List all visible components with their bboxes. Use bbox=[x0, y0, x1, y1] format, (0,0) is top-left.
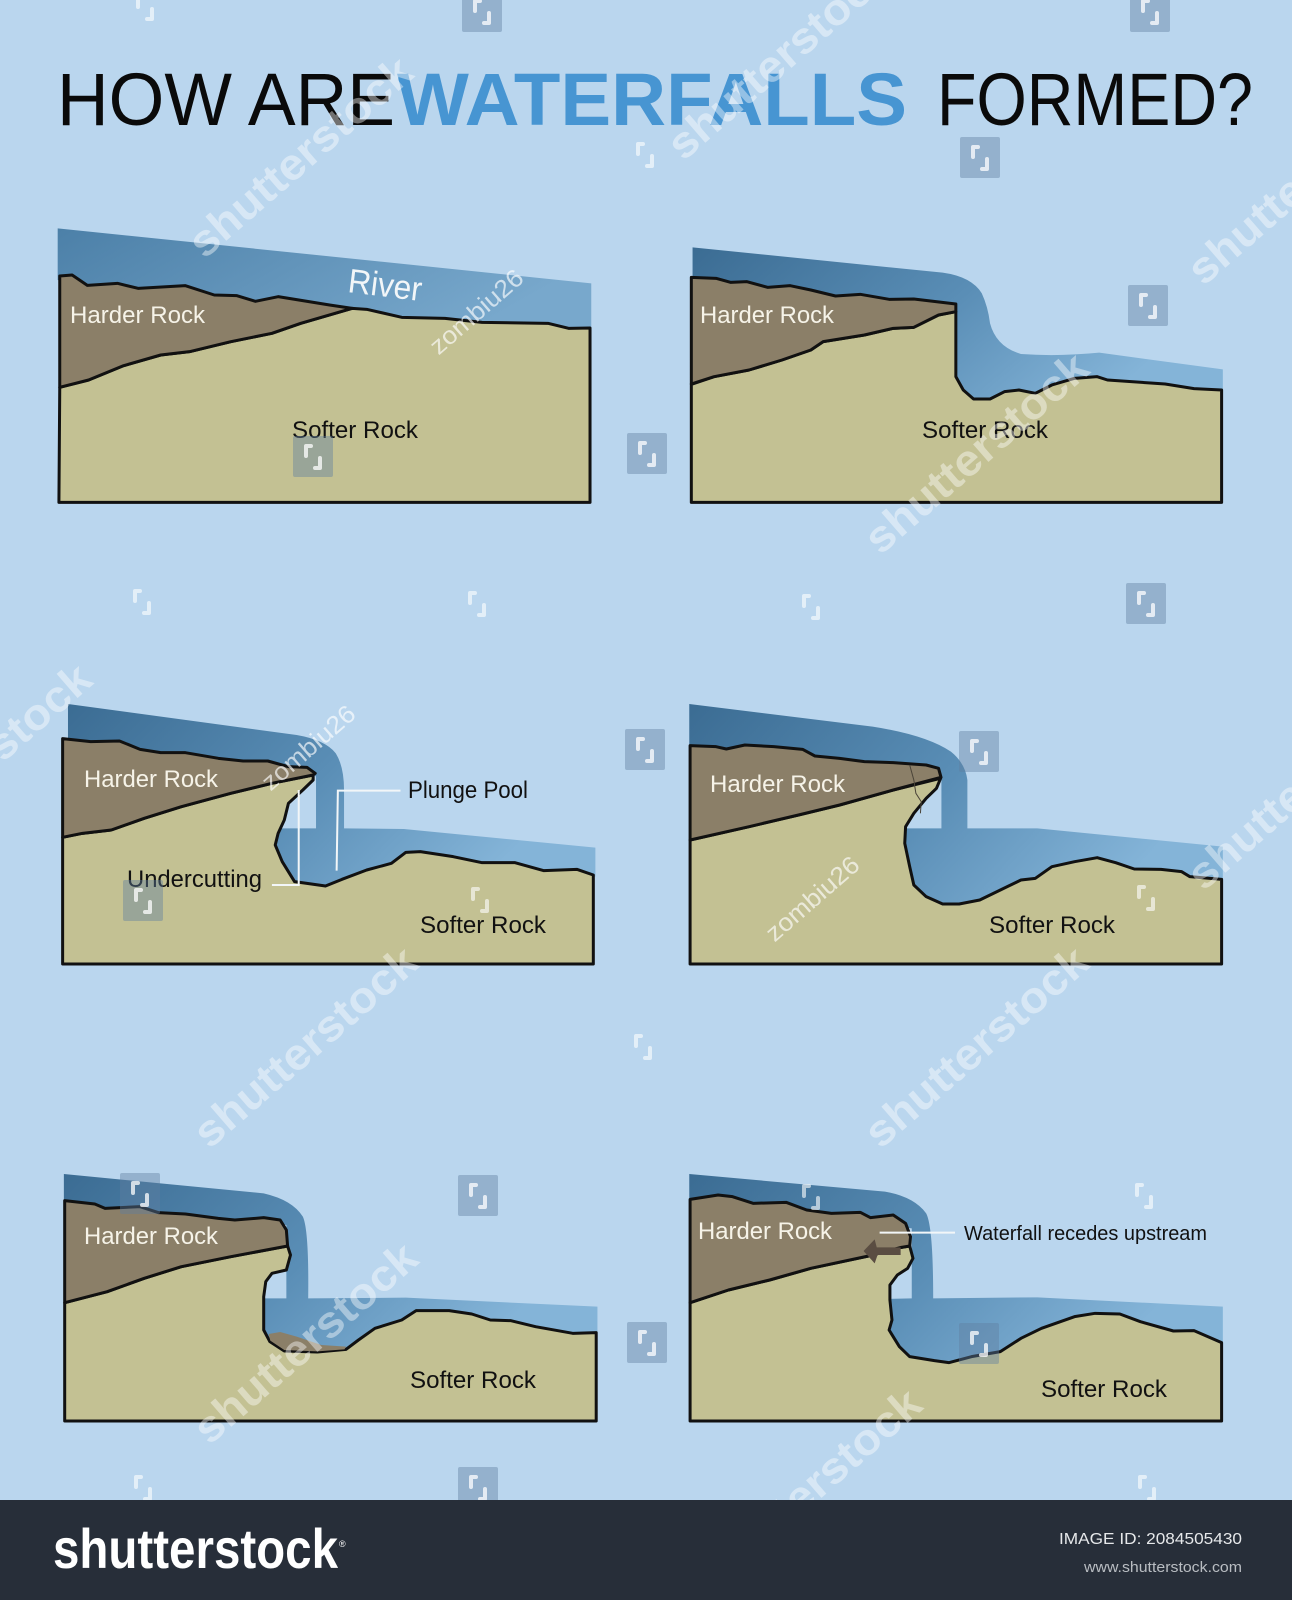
label: softer rock: Softer Rock bbox=[292, 417, 419, 444]
watermarks: shutterstock bbox=[179, 46, 423, 267]
water: river and fall bbox=[693, 247, 1223, 403]
arrow: recession direction bbox=[864, 1239, 901, 1263]
label: harder rock: Harder Rock bbox=[698, 1218, 833, 1245]
watermarks: shutterstock bbox=[855, 936, 1099, 1157]
water: river, fall and pool bbox=[64, 1174, 597, 1353]
harder rock bbox=[65, 1201, 288, 1303]
title: FORMED? bbox=[937, 58, 1253, 141]
label: harder rock: Harder Rock bbox=[84, 766, 219, 793]
softer rock bbox=[63, 775, 593, 964]
label: harder rock: Harder Rock bbox=[710, 771, 846, 798]
label: harder rock: Harder Rock bbox=[70, 302, 206, 329]
label: harder rock: Harder Rock bbox=[84, 1223, 219, 1250]
label: harder rock: Harder Rock bbox=[700, 302, 835, 329]
leader line bbox=[880, 1232, 955, 1234]
label: softer rock: Softer Rock bbox=[922, 417, 1049, 444]
watermarks: shutterstock bbox=[184, 936, 428, 1157]
label: plunge pool: Plunge Pool bbox=[408, 777, 528, 804]
panel: stage 4 deeper pool and cracking bbox=[689, 704, 1223, 964]
watermarks: zombiu26 bbox=[256, 700, 361, 796]
watermarks: zombiu26 bbox=[424, 264, 529, 360]
footer logo: shutterstock bbox=[53, 1517, 339, 1580]
image id: IMAGE ID: 2084505430 bbox=[1059, 1531, 1242, 1548]
watermarks: shutterstock bbox=[184, 1232, 428, 1453]
softer rock bbox=[65, 1246, 596, 1421]
title: HOW ARE bbox=[57, 58, 395, 141]
title: WATERFALLS bbox=[397, 58, 907, 141]
watermarks: zombiu26 bbox=[760, 851, 865, 947]
harder rock bbox=[60, 275, 352, 387]
watermarks: shutterstock bbox=[688, 1378, 932, 1599]
softer rock bbox=[690, 1246, 1222, 1421]
title bbox=[57, 58, 1253, 141]
softer rock bbox=[691, 312, 1222, 502]
label: softer rock: Softer Rock bbox=[410, 1367, 537, 1394]
harder rock bbox=[690, 1195, 911, 1303]
label: waterfall recedes upstream: Waterfall recedes upstream bbox=[964, 1223, 1207, 1245]
panel: stage 1 river over rock bbox=[58, 228, 591, 502]
panel: stage 3 plunge pool and undercutting bbox=[63, 704, 595, 964]
panel: stage 5 collapse and sediment bbox=[64, 1174, 597, 1421]
label: softer rock: Softer Rock bbox=[989, 912, 1116, 939]
water: river, fall and pool bbox=[689, 1174, 1223, 1367]
softer rock bbox=[59, 308, 590, 502]
harder rock bbox=[690, 745, 941, 840]
leader line: undercutting bbox=[272, 790, 299, 885]
panel: stage 6 waterfall recedes bbox=[689, 1174, 1223, 1421]
harder rock bbox=[691, 277, 956, 384]
water: river, fall and pool bbox=[689, 704, 1223, 910]
footer registered mark: ® bbox=[339, 1539, 346, 1549]
harder rock bbox=[63, 739, 315, 837]
footer bar bbox=[0, 1500, 1292, 1600]
sediment at pool bottom bbox=[269, 1332, 346, 1351]
label: softer rock: Softer Rock bbox=[420, 912, 547, 939]
website: www.shutterstock.com bbox=[1083, 1560, 1242, 1576]
crack in rock bbox=[910, 765, 921, 813]
water: river, fall and pool bbox=[68, 704, 595, 890]
label: river: River bbox=[346, 262, 424, 309]
watermarks: shutterstock bbox=[855, 342, 1099, 563]
water: river bbox=[58, 228, 591, 333]
panel: stage 2 erosion begins bbox=[691, 247, 1223, 502]
label: undercutting: Undercutting bbox=[127, 866, 262, 893]
leader line: plunge pool bbox=[337, 791, 400, 871]
softer rock bbox=[690, 778, 1222, 964]
label: softer rock: Softer Rock bbox=[1041, 1376, 1168, 1403]
